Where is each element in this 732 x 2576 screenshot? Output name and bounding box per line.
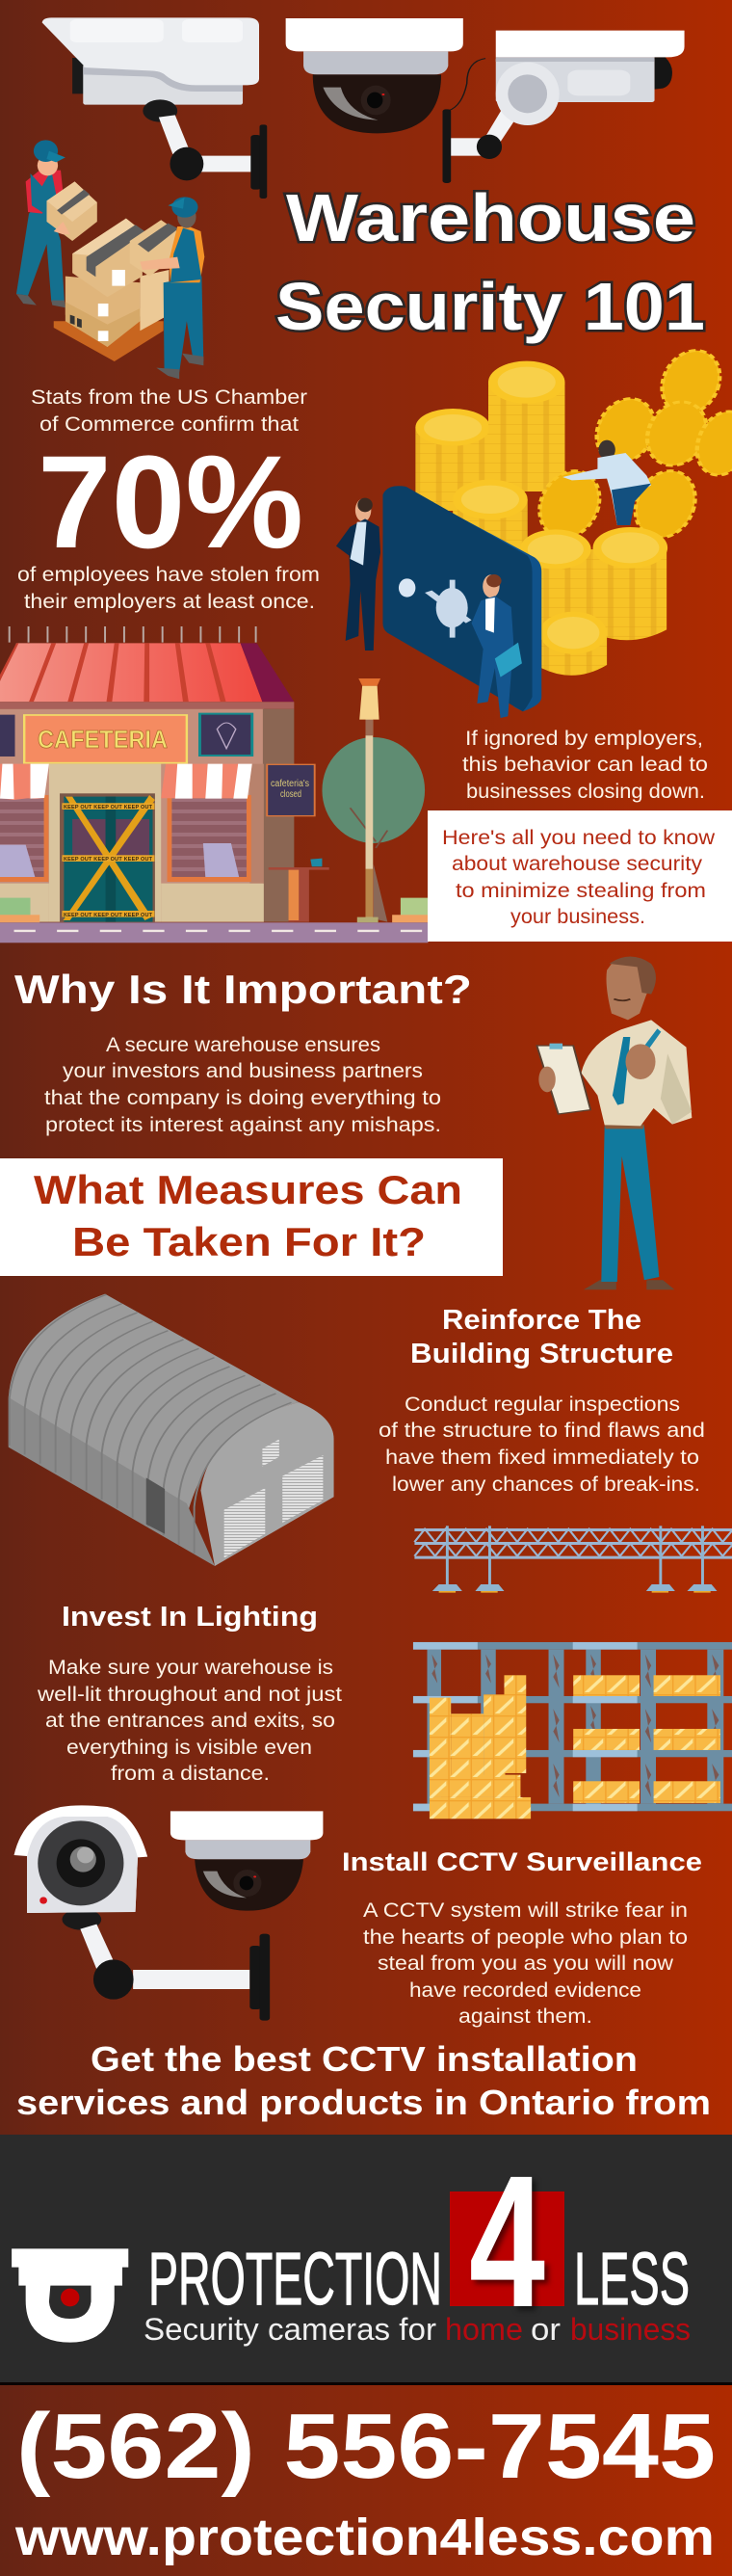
logo tagline [144, 2312, 691, 2347]
text block: lighting: well-lit throughout and not just [37, 1684, 342, 1706]
illustration: warehouse shelves with crates [413, 1642, 732, 1819]
call to action heading [16, 2039, 711, 2122]
stat description: of employees have stolen from [17, 564, 320, 586]
illustration: closed cafeteria [0, 626, 429, 943]
logo tagline: or [531, 2312, 561, 2347]
icon: warehouse workers with boxes [16, 140, 204, 379]
illustration: thief on coins [562, 440, 651, 525]
closing-down text [462, 728, 708, 803]
heading: why is it important: Why Is It Important? [14, 967, 472, 1012]
text block: lighting: everything is visible even [66, 1737, 312, 1759]
logo wordmark [148, 2137, 690, 2347]
cafeteria sign text: CAFETERIA [38, 725, 168, 754]
text block: why important: protect its interest against any mishaps. [45, 1114, 441, 1136]
panel: white intro callout: Here's all you need to know [442, 827, 716, 849]
stat intro text: Stats from the US Chamber [31, 386, 307, 409]
logo tagline: business [570, 2312, 691, 2347]
icon: security camera right [442, 31, 685, 183]
closing-down text: this behavior can lead to [462, 754, 708, 776]
stat description [17, 564, 320, 613]
text block: why important: A secure warehouse ensures [106, 1034, 380, 1056]
logo wordmark: 4 [469, 2137, 545, 2347]
text block: why important: your investors and business partners [63, 1060, 423, 1082]
text block: reinforce: of the structure to find flaws and [379, 1420, 705, 1442]
illustration: businessman right [472, 574, 522, 718]
text block: why important [44, 1034, 441, 1136]
hanging sign text [271, 779, 309, 800]
text block: cctv [363, 1899, 688, 2028]
phone number: (562) 556-7545 [16, 2395, 716, 2498]
stat intro text: of Commerce confirm that [39, 413, 299, 436]
closing-down text: If ignored by employers, [465, 728, 703, 750]
panel: what measures heading: Be Taken For It? [72, 1219, 426, 1264]
keep out tape text [64, 805, 153, 918]
illustration: lighting truss [414, 1526, 732, 1593]
panel: logo footer band [0, 2135, 732, 2385]
text block: lighting: from a distance. [111, 1763, 270, 1785]
text block: lighting [37, 1657, 342, 1785]
title: Security 101 [275, 269, 705, 344]
logo wordmark: PROTECTION [148, 2238, 442, 2321]
illustration: bullet camera bottom [14, 1805, 270, 2021]
call to action heading: services and products in Ontario from [16, 2083, 711, 2122]
panel: white intro callout: your business. [510, 906, 645, 928]
text block: cctv: steal from you as you will now [378, 1952, 674, 1975]
text block: reinforce: lower any chances of break-ins. [392, 1474, 700, 1496]
call to action heading: Get the best CCTV installation [91, 2039, 638, 2079]
stat: 70%: 70% [38, 429, 303, 576]
illustration: gold coins [415, 347, 732, 676]
logo tagline: home [445, 2312, 523, 2347]
illustration: warehouse building [9, 1294, 334, 1566]
illustration: man with clipboard [536, 956, 692, 1289]
panel: white intro callout [428, 810, 732, 942]
illustration: businessman left [336, 498, 380, 651]
icon: logo camera [12, 2248, 128, 2343]
heading: invest in lighting: Invest In Lighting [62, 1602, 318, 1633]
title [275, 180, 705, 344]
panel: what measures heading [0, 1158, 503, 1276]
panel: what measures heading: What Measures Can [34, 1167, 462, 1212]
website url: www.protection4less.com [14, 2509, 715, 2566]
keep out tape text: KEEP OUT KEEP OUT KEEP OUT [64, 857, 153, 863]
text block: cctv: A CCTV system will strike fear in [363, 1899, 688, 1922]
icon: security camera left [42, 17, 267, 199]
heading: install cctv: Install CCTV Surveillance [342, 1847, 702, 1876]
heading: reinforce: Reinforce The [442, 1305, 641, 1336]
title: Warehouse [286, 180, 695, 255]
panel: white intro callout: to minimize stealing from [456, 880, 706, 902]
stat description: their employers at least once. [24, 591, 315, 613]
text block: cctv: the hearts of people who plan to [363, 1926, 688, 1949]
text block: lighting: at the entrances and exits, so [45, 1710, 335, 1732]
heading: reinforce [410, 1305, 673, 1369]
hanging sign text: closed [280, 789, 301, 800]
keep out tape text: KEEP OUT KEEP OUT KEEP OUT [64, 805, 153, 810]
keep out tape text: KEEP OUT KEEP OUT KEEP OUT [64, 913, 153, 918]
panel: white intro callout: about warehouse security [452, 853, 703, 875]
closing-down text: businesses closing down. [466, 781, 705, 803]
illustration: safe door [382, 486, 541, 711]
text block: lighting: Make sure your warehouse is [48, 1657, 333, 1679]
text block: cctv: against them. [458, 2005, 592, 2028]
icon: dome camera top [286, 18, 463, 133]
illustration: dome camera bottom [170, 1811, 323, 1911]
text block: cctv: have recorded evidence [409, 1979, 641, 2002]
text block: reinforce: Conduct regular inspections [405, 1394, 680, 1416]
text block: why important: that the company is doing everything to [44, 1087, 441, 1109]
hanging sign text: cafeteria's [271, 779, 309, 789]
logo tagline: Security cameras for [144, 2312, 436, 2347]
heading: reinforce: Building Structure [410, 1339, 673, 1369]
text block: reinforce [379, 1394, 705, 1496]
stat intro text [31, 386, 307, 436]
text block: reinforce: have them fixed immediately to [385, 1447, 699, 1469]
